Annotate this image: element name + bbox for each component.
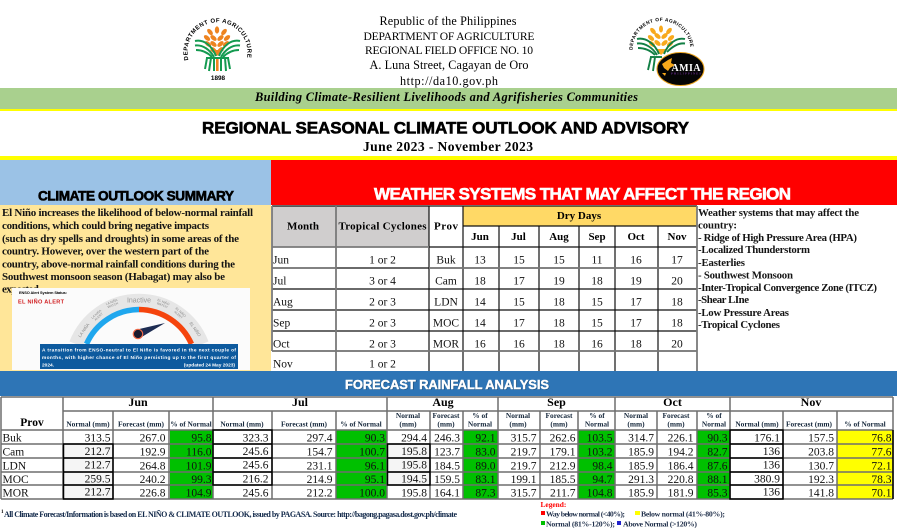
row: MOR — [2, 486, 892, 500]
row: MOR: MOR — [2, 488, 29, 500]
dry days rows: 20 — [671, 338, 683, 350]
month and tropical cyclone rows: Jun — [273, 254, 289, 266]
panel: climate outlook summary — [0, 160, 271, 372]
column sub-headers: Forecast (mm) — [281, 420, 328, 428]
column sub-headers: (mm) — [437, 420, 455, 428]
month headers: Aug — [432, 395, 454, 409]
logo: AMIA Philippines seal: PHILIPPINES — [671, 72, 701, 76]
column sub-headers — [66, 411, 886, 428]
dry days rows: 18 — [591, 276, 603, 288]
row: Cam: 212.7 — [85, 446, 111, 458]
chart: ENSO alert gauge: ENSO Alert System Status: — [19, 290, 67, 295]
text block: weather systems list: -Low Pressure Areas — [698, 307, 789, 319]
row: MOR: 212.2 — [307, 488, 333, 500]
row: MOR: 195.8 — [401, 488, 427, 500]
month headers: Jul — [292, 395, 309, 409]
row: MOC: 88.1 — [707, 474, 728, 486]
header: agency address block: A. Luna Street, Cagayan de Oro — [370, 58, 528, 72]
title: REGIONAL SEASONAL CLIMATE OUTLOOK AND ADVISORY — [202, 118, 690, 138]
chart: ENSO alert gauge: A transition from ENSO-neutral to El Niño is favored in the next couple of — [42, 348, 236, 354]
chart: ENSO alert gauge: (updated 24 May 2023) — [184, 362, 235, 368]
legend: Below normal (41%-80%); — [641, 510, 725, 518]
row: LDN: 98.4 — [592, 460, 613, 472]
row: MOR: 315.7 — [511, 488, 537, 500]
text block: El Niño summary: country. However, over the western part of the — [2, 246, 209, 258]
dry days rows: Buk — [436, 254, 456, 266]
title — [0, 118, 897, 160]
dry days rows: 16 — [591, 338, 603, 350]
column sub-headers: Normal — [624, 411, 648, 420]
month headers: Prov — [20, 417, 44, 429]
chart: ENSO alert gauge: WATCH — [156, 301, 169, 309]
row: Buk — [2, 432, 892, 444]
row: Cam: 136 — [763, 446, 780, 458]
column sub-headers: (mm) — [509, 420, 527, 428]
row: Buk: 157.5 — [808, 432, 834, 444]
column sub-headers: Normal — [506, 411, 530, 420]
row: Buk: 92.1 — [475, 432, 496, 444]
table header: Jul — [511, 231, 526, 243]
row: Cam: 179.1 — [550, 446, 576, 458]
column sub-headers: Normal — [468, 420, 492, 428]
text block: weather systems list: -Inter-Tropical Convergence Zone (ITCZ) — [698, 282, 877, 294]
row: Cam: 219.7 — [511, 446, 537, 458]
row: LDN: 130.7 — [808, 460, 834, 472]
tagline band — [0, 88, 897, 111]
chart: ENSO alert gauge: LA NIÑA — [90, 307, 103, 320]
row: LDN: LDN — [2, 460, 27, 472]
row: MOR: 164.1 — [434, 488, 460, 500]
chart: ENSO alert gauge: 2024. — [42, 362, 54, 368]
column sub-headers: Forecast — [433, 411, 460, 420]
month and tropical cyclone rows: Aug — [273, 296, 293, 308]
chart: ENSO alert gauge: WATCH — [107, 301, 120, 309]
row: Buk: 315.7 — [511, 432, 537, 444]
dry days rows: 18 — [671, 318, 683, 330]
dry days rows: 16 — [630, 254, 642, 266]
row: MOC: MOC — [2, 474, 29, 486]
row: Cam: Cam — [2, 446, 24, 458]
row: LDN: 89.0 — [475, 460, 496, 472]
row: Buk: 103.5 — [587, 432, 613, 444]
dry days rows: 19 — [630, 276, 642, 288]
row: LDN: 96.1 — [365, 460, 385, 472]
month and tropical cyclone rows: Oct — [273, 338, 290, 350]
logo: AMIA Philippines seal: DEPARTMENT OF AGRICULTURE — [629, 18, 694, 50]
dry days rows: 14 — [474, 318, 486, 330]
dry days rows: 16 — [474, 338, 486, 350]
row: Buk: 323.3 — [243, 432, 269, 444]
row: Cam: 185.9 — [628, 446, 654, 458]
row: Buk: 226.1 — [668, 432, 694, 444]
chart: ENSO alert gauge: EL NIÑO — [175, 306, 188, 318]
dry days rows: 18 — [474, 276, 486, 288]
text block: weather systems list: Weather systems that may affect the — [698, 207, 859, 219]
row: LDN: 195.8 — [401, 460, 427, 472]
row: Cam — [2, 446, 892, 458]
row: Cam: 195.8 — [401, 446, 427, 458]
month and tropical cyclone rows: 3 or 4 — [369, 276, 396, 288]
legend — [540, 500, 725, 528]
month and tropical cyclone rows: 1 or 2 — [369, 254, 396, 266]
column sub-headers: Forecast (mm) — [118, 420, 165, 428]
row: MOC: 199.1 — [511, 474, 537, 486]
row: Cam: 100.7 — [359, 446, 385, 458]
column sub-headers: (mm) — [550, 420, 568, 428]
chart: ENSO alert gauge: ALERT — [173, 310, 184, 320]
month and tropical cyclone rows: 2 or 3 — [369, 296, 396, 308]
row: MOC: 214.9 — [307, 474, 333, 486]
row: Buk: 313.5 — [85, 432, 111, 444]
row: MOC: 192.3 — [808, 474, 834, 486]
row: MOC: 220.8 — [668, 474, 694, 486]
row: LDN: 212.9 — [550, 460, 576, 472]
row: MOR: 104.9 — [186, 488, 212, 500]
row: Cam: 245.6 — [243, 446, 269, 458]
title: June 2023 - November 2023 — [363, 139, 533, 154]
dry days rows: 17 — [630, 296, 642, 308]
table header: Nov — [668, 231, 687, 243]
chart: ENSO alert gauge: EL NIÑO — [157, 297, 171, 306]
chart: ENSO alert gauge: LA NIÑA — [77, 322, 91, 338]
text block: weather systems list: -Shear LIne — [698, 294, 749, 306]
chart: ENSO alert gauge: ALERT — [93, 312, 104, 322]
row: Buk: 246.3 — [434, 432, 460, 444]
column sub-headers: Normal (mm) — [220, 420, 264, 428]
row: MOC: 159.5 — [434, 474, 460, 486]
heading: climate outlook summary: CLIMATE OUTLOOK SUMMARY — [38, 188, 234, 204]
text block: weather systems list: - Ridge of High Pressure Area (HPA) — [698, 232, 857, 244]
chart: ENSO alert gauge — [12, 288, 250, 370]
month headers: Oct — [663, 395, 682, 409]
row: Buk: 262.6 — [550, 432, 576, 444]
row: Cam: 203.8 — [808, 446, 834, 458]
column sub-headers: Forecast — [663, 411, 690, 420]
row: Cam: 83.0 — [475, 446, 496, 458]
row: MOR: 70.1 — [871, 488, 892, 500]
header: agency address block: DEPARTMENT OF AGRICULTURE — [364, 30, 534, 43]
header: agency address block: REGIONAL FIELD OFFICE NO. 10 — [365, 44, 533, 57]
column sub-headers: (mm) — [627, 420, 645, 428]
dry days rows: 18 — [553, 338, 565, 350]
row: Cam: 82.7 — [707, 446, 728, 458]
column sub-headers: % of Normal — [844, 420, 886, 428]
row: Buk: 90.3 — [707, 432, 728, 444]
month headers — [20, 395, 821, 429]
row: LDN: 264.8 — [140, 460, 166, 472]
row: Buk: 76.8 — [871, 432, 892, 444]
row: Buk: 267.0 — [140, 432, 166, 444]
row: Buk: 176.1 — [754, 432, 780, 444]
logo: Department of Agriculture seal: DEPARTMENT OF AGRICULTURE — [183, 18, 252, 60]
row: MOC: 216.2 — [243, 474, 269, 486]
heading band: forecast rainfall analysis — [0, 371, 897, 396]
row: MOC — [2, 474, 892, 486]
month and tropical cyclone rows: Jul — [273, 276, 286, 288]
dry days rows: 18 — [553, 318, 565, 330]
chart: ENSO alert gauge: EL NIÑO — [188, 321, 202, 338]
column sub-headers: % of Normal — [340, 420, 382, 428]
logo: AMIA Philippines seal — [629, 18, 704, 86]
row: MOR: 181.9 — [668, 488, 694, 500]
row: MOC: 380.9 — [754, 474, 780, 486]
text block: weather systems list: - Southwest Monsoon — [698, 270, 793, 282]
row: MOR: 211.7 — [550, 488, 576, 500]
column sub-headers: Normal — [585, 420, 609, 428]
row: MOC: 78.3 — [871, 474, 892, 486]
footnote: data source: All Climate Forecast/Information is based on EL NIÑO & CLIMATE OUTLOOK, issued by PAGASA. Source: http://bagong.pagasa.dost.gov.ph/climate — [4, 510, 457, 519]
dry days rows: 15 — [513, 254, 525, 266]
dry days rows: 17 — [513, 318, 525, 330]
table header: Oct — [627, 231, 645, 243]
text block: weather systems list: -Easterlies — [698, 257, 745, 269]
month and tropical cyclone rows — [273, 254, 396, 370]
dry days rows: 14 — [474, 296, 486, 308]
month and tropical cyclone rows: Nov — [273, 358, 293, 370]
row: LDN: 136 — [763, 460, 780, 472]
row: MOR: 212.7 — [85, 486, 111, 498]
table header — [287, 210, 687, 243]
row: Cam: 194.2 — [668, 446, 694, 458]
legend: Normal (81%-120%); — [546, 520, 615, 528]
row: LDN: 185.9 — [628, 460, 654, 472]
dry days rows: 15 — [591, 318, 603, 330]
dry days rows: 17 — [671, 254, 683, 266]
row: MOR: 226.8 — [140, 488, 166, 500]
row: Buk: 294.4 — [401, 432, 427, 444]
row: Cam: 154.7 — [307, 446, 333, 458]
header: agency address block — [364, 14, 534, 88]
row: LDN: 184.5 — [434, 460, 460, 472]
dry days rows: 15 — [553, 254, 565, 266]
row: MOR: 100.0 — [359, 488, 385, 500]
row: LDN: 87.6 — [707, 460, 728, 472]
row: Cam: 123.7 — [434, 446, 460, 458]
row: LDN: 212.7 — [85, 460, 111, 472]
dry days rows: MOC — [433, 318, 459, 330]
row: MOC: 194.5 — [401, 474, 427, 486]
row: Buk: 90.3 — [365, 432, 385, 444]
row: MOR: 87.3 — [475, 488, 496, 500]
chart: ENSO alert gauge: EL NIÑO ALERT — [18, 298, 65, 306]
row: MOC: 94.7 — [592, 474, 613, 486]
panel: weather systems heading — [271, 160, 897, 205]
row: LDN: 219.7 — [511, 460, 537, 472]
row: Buk: Buk — [2, 432, 22, 444]
chart: ENSO alert gauge: months, with higher chance of El Niño persisting up to the first quarter of — [42, 355, 236, 361]
dry days rows: 18 — [671, 296, 683, 308]
dry days rows: 15 — [513, 296, 525, 308]
month and tropical cyclone rows: Sep — [273, 318, 290, 330]
chart: ENSO alert gauge: LA NIÑA — [105, 297, 119, 306]
text block: weather systems list: country: — [698, 220, 737, 232]
legend: Way below normal (<40%); — [546, 510, 625, 518]
month headers: Sep — [547, 395, 566, 409]
row: MOR: 136 — [763, 486, 780, 498]
header: agency address block: http://da10.gov.ph — [400, 74, 498, 88]
logo: Department of Agriculture seal: 1898 — [211, 75, 226, 82]
row: MOC: 95.1 — [365, 474, 385, 486]
dry days rows: 20 — [671, 276, 683, 288]
dry days rows: 15 — [591, 296, 603, 308]
month headers: Jun — [128, 395, 148, 409]
percent of normal cell fills — [64, 430, 893, 499]
row: MOC: 99.3 — [191, 474, 212, 486]
table header: Tropical Cyclones — [338, 220, 427, 232]
row: LDN: 186.4 — [668, 460, 694, 472]
column sub-headers: (mm) — [399, 420, 417, 428]
legend: Legend: — [540, 500, 566, 509]
dry days rows: LDN — [434, 296, 459, 308]
dry days rows: 17 — [630, 318, 642, 330]
dry days rows: 13 — [474, 254, 486, 266]
text block: weather systems list: -Tropical Cyclones — [698, 319, 780, 331]
table header: Jun — [471, 231, 489, 243]
text block: El Niño summary: Southwest monsoon season (Habagat) may also be — [2, 271, 225, 283]
dry days rows: 18 — [630, 338, 642, 350]
row: MOR: 185.9 — [628, 488, 654, 500]
chart: ENSO alert gauge: Inactive — [127, 298, 151, 304]
month and tropical cyclone rows: 2 or 3 — [369, 318, 396, 330]
row: MOC: 259.5 — [85, 474, 111, 486]
thick cell outlines — [64, 430, 893, 499]
row: Buk: 314.7 — [628, 432, 654, 444]
footnote: data source: 1 — [1, 510, 4, 515]
text block: El Niño summary: expected. — [2, 284, 41, 296]
column sub-headers: Forecast — [546, 411, 573, 420]
column sub-headers: Normal — [396, 411, 420, 420]
table header: Month — [287, 220, 319, 232]
row: Buk: 297.4 — [307, 432, 333, 444]
row: MOR: 245.6 — [243, 488, 269, 500]
row: LDN: 72.1 — [871, 460, 892, 472]
text block: weather systems list — [698, 207, 877, 331]
table: tropical cyclones and dry days — [271, 205, 697, 372]
column sub-headers: Forecast (mm) — [786, 420, 833, 428]
column sub-headers: (mm) — [667, 420, 685, 428]
logo: AMIA Philippines seal: AMIA — [672, 63, 701, 74]
month headers: Nov — [801, 395, 821, 409]
dry days rows: 11 — [591, 254, 603, 266]
column sub-headers: % of — [706, 411, 722, 420]
text block: El Niño summary: (such as dry spells and droughts) in some areas of the — [2, 233, 239, 245]
logo: Department of Agriculture seal — [183, 18, 252, 82]
header: agency address block: Republic of the Philippines — [380, 14, 517, 28]
row: MOC: 240.2 — [140, 474, 166, 486]
panel: weather systems heading: WEATHER SYSTEMS THAT MAY AFFECT THE REGION — [374, 184, 791, 204]
dry days rows: 17 — [513, 276, 525, 288]
column sub-headers: Normal — [702, 420, 726, 428]
column sub-headers: % of — [589, 411, 605, 420]
row: LDN: 245.6 — [243, 460, 269, 472]
row: MOC: 185.5 — [550, 474, 576, 486]
row: LDN — [2, 460, 892, 472]
text block: El Niño summary: country, above-normal rainfall conditions during the — [2, 258, 235, 270]
dry days rows: 16 — [513, 338, 525, 350]
table: forecast rainfall analysis — [0, 395, 897, 500]
row: MOC: 83.1 — [475, 474, 496, 486]
column sub-headers: % of — [472, 411, 488, 420]
column sub-headers: Normal (mm) — [66, 420, 110, 428]
text block: weather systems list: -Localized Thunderstorm — [698, 244, 810, 256]
month and tropical cyclone rows: 2 or 3 — [369, 338, 396, 350]
row: MOR: 85.3 — [707, 488, 728, 500]
dry days rows — [433, 254, 683, 350]
dry days rows: MOR — [433, 338, 459, 350]
table header: Aug — [549, 231, 569, 243]
table header: Sep — [588, 231, 606, 243]
table header: Prov — [434, 220, 458, 232]
table header: Dry Days — [557, 210, 602, 222]
heading band: forecast rainfall analysis: FORECAST RAINFALL ANALYSIS — [346, 378, 550, 393]
month and tropical cyclone rows: 1 or 2 — [369, 358, 396, 370]
text block: El Niño summary: El Niño increases the likelihood of below-normal rainfall — [2, 207, 253, 219]
row: MOC: 291.3 — [628, 474, 654, 486]
text block: El Niño summary — [2, 207, 253, 296]
legend: Above Normal (>120%) — [623, 520, 697, 528]
row: LDN: 101.9 — [186, 460, 212, 472]
row: Buk: 95.8 — [191, 432, 212, 444]
dry days rows: Cam — [435, 276, 457, 288]
tagline band: Building Climate-Resilient Livelihoods and Agrifisheries Communities — [254, 90, 638, 104]
row: Cam: 192.9 — [140, 446, 166, 458]
row: MOR: 104.8 — [587, 488, 613, 500]
text block: El Niño summary: conditions, which could bring negative impacts — [2, 220, 210, 232]
column sub-headers: Normal (mm) — [735, 420, 779, 428]
dry days rows: 18 — [553, 296, 565, 308]
row: MOR: 141.8 — [808, 488, 834, 500]
column sub-headers: % of Normal — [170, 420, 212, 428]
heading band: forecast rainfall analysis: FORECAST RAINFALL ANALYSIS — [345, 377, 549, 392]
row: Cam: 103.2 — [587, 446, 613, 458]
dry days rows: 19 — [553, 276, 565, 288]
row: Cam: 77.6 — [871, 446, 892, 458]
row: LDN: 231.1 — [307, 460, 333, 472]
row: Cam: 116.0 — [186, 446, 212, 458]
